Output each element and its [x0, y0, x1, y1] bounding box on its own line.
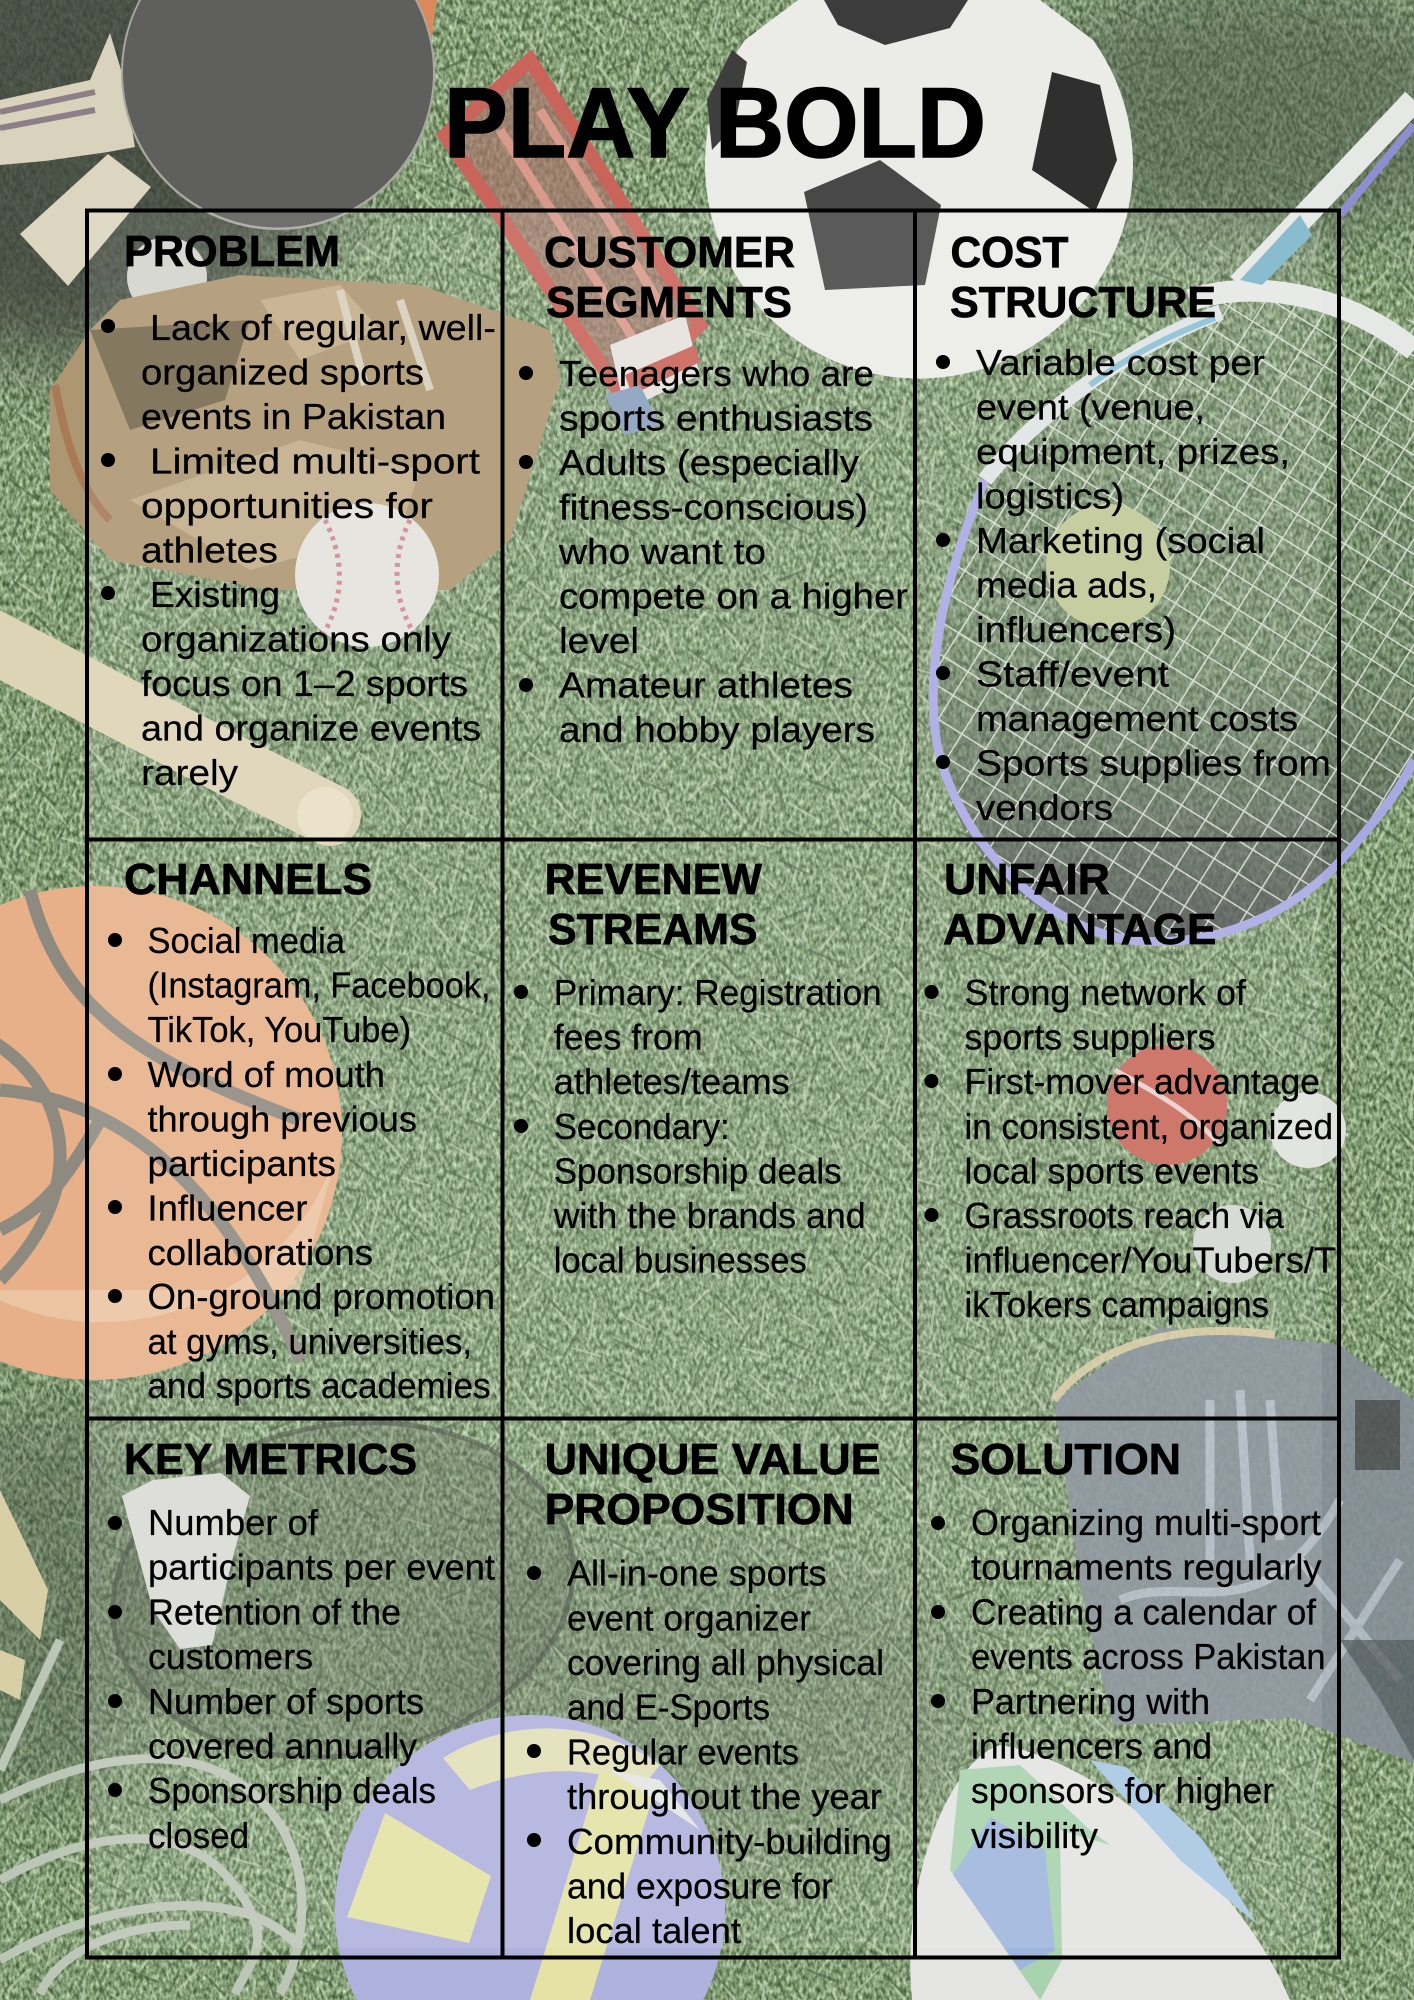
- list: channels: collaborations: [148, 1232, 373, 1273]
- table tennis paddle: [0, 0, 437, 317]
- list: key metrics: participants per event: [148, 1547, 495, 1588]
- heading: revenew streams: REVENEW: [545, 855, 762, 904]
- list: customer segments: Amateur athletes: [559, 664, 853, 706]
- list: problem: organized sports: [141, 352, 424, 392]
- list: unfair advantage: Grassroots reach via: [964, 1195, 1285, 1236]
- list: key metrics: customers: [148, 1636, 313, 1677]
- list: revenew streams: Sponsorship deals: [554, 1150, 842, 1192]
- skipping rope handles: [0, 1490, 302, 1994]
- lean canvas grid: [87, 210, 1339, 1958]
- list: cost structure: Variable cost per: [976, 342, 1265, 383]
- list: problem: opportunities for: [141, 485, 433, 526]
- heading: customer segments: CUSTOMER: [544, 228, 795, 277]
- list: solution: Creating a calendar of: [971, 1591, 1317, 1632]
- heading: unfair advantage: UNFAIR: [944, 855, 1110, 904]
- baseball bat: [0, 640, 353, 843]
- list: key metrics: Retention of the: [148, 1591, 401, 1632]
- baseball: [295, 503, 439, 647]
- list: customer segments: Teenagers who are: [559, 353, 874, 394]
- heading: solution: SOLUTION: [950, 1435, 1181, 1484]
- panel: channels: [108, 855, 495, 1406]
- list: cost structure: media ads,: [976, 564, 1157, 606]
- list: revenew streams: local businesses: [554, 1240, 807, 1280]
- shuttlecock: [122, 1473, 250, 1649]
- rugby ball: [910, 1745, 1290, 2000]
- list: channels: Influencer: [148, 1188, 308, 1228]
- list: cost structure: management costs: [976, 698, 1298, 739]
- list: unique value proposition: event organizer: [567, 1597, 811, 1638]
- list: key metrics: covered annually: [148, 1726, 417, 1766]
- list: key metrics: Sponsorship deals: [148, 1770, 436, 1811]
- panel: unfair advantage: [924, 855, 1336, 1325]
- list: solution: events across Pakistan: [971, 1636, 1326, 1677]
- list: unique value proposition: Regular events: [567, 1731, 799, 1772]
- list: key metrics: [108, 1502, 495, 1856]
- lighter overlay behind grid: [87, 212, 1322, 1948]
- list: solution: sponsors for higher: [971, 1770, 1274, 1811]
- list: unfair advantage: local sports events: [964, 1150, 1259, 1192]
- list: unfair advantage: [924, 972, 1336, 1325]
- list: customer segments: compete on a higher: [559, 576, 908, 616]
- list: cost structure: vendors: [976, 787, 1113, 828]
- heading: customer segments: SEGMENTS: [546, 278, 792, 327]
- panel: cost structure: [936, 228, 1331, 828]
- list: solution: influencers and: [971, 1726, 1212, 1766]
- list: customer segments: Adults (especially: [559, 442, 859, 483]
- panel: key metrics: [108, 1435, 495, 1856]
- heading: cost structure: [950, 228, 1216, 327]
- list: channels: at gyms, universities,: [148, 1321, 472, 1362]
- list: revenew streams: [514, 972, 882, 1280]
- soccer ball: [705, 0, 1133, 379]
- list: unique value proposition: All-in-one sports: [567, 1553, 826, 1594]
- list: customer segments: who want to: [558, 531, 766, 572]
- list: customer segments: sports enthusiasts: [559, 398, 873, 438]
- list: cost structure: Marketing (social: [976, 520, 1265, 561]
- list: problem: organizations only: [141, 618, 451, 660]
- heading: problem: PROBLEM: [124, 227, 340, 276]
- list: revenew streams: Secondary:: [554, 1106, 730, 1147]
- list: revenew streams: with the brands and: [553, 1195, 866, 1236]
- list: channels: (Instagram, Facebook,: [148, 964, 490, 1006]
- list: cost structure: influencers): [976, 609, 1176, 650]
- list: unique value proposition: Community-building: [567, 1821, 892, 1862]
- heading: unique value proposition: [545, 1435, 881, 1534]
- second racket: [86, 1387, 600, 1793]
- list: customer segments: level: [559, 620, 639, 661]
- panel: revenew streams: [514, 855, 882, 1280]
- list: unfair advantage: ikTokers campaigns: [964, 1284, 1269, 1325]
- heading: customer segments: [544, 228, 795, 327]
- list: solution: tournaments regularly: [971, 1547, 1322, 1588]
- list: solution: [931, 1502, 1326, 1856]
- list: solution: Partnering with: [971, 1681, 1210, 1722]
- list: channels: Word of mouth: [148, 1054, 385, 1095]
- list: unfair advantage: First-mover advantage: [964, 1061, 1320, 1102]
- list: problem: rarely: [141, 752, 238, 793]
- panel: solution: [931, 1435, 1326, 1856]
- heading: revenew streams: [545, 855, 762, 954]
- list: channels: through previous: [148, 1098, 417, 1140]
- list: problem: focus on 1–2 sports: [141, 663, 468, 704]
- red cricket frame: [445, 60, 700, 435]
- panel: problem: [101, 227, 496, 793]
- running shoes: [1054, 1327, 1414, 1763]
- list: cost structure: logistics): [976, 476, 1124, 516]
- list: key metrics: Number of sports: [148, 1681, 424, 1722]
- list: channels: TikTok, YouTube): [148, 1009, 411, 1050]
- list: key metrics: closed: [148, 1815, 249, 1856]
- list: channels: participants: [148, 1143, 336, 1184]
- list: customer segments: [519, 353, 908, 750]
- list: channels: [108, 920, 495, 1406]
- badminton racket: [920, 100, 1414, 960]
- baseball glove: [50, 275, 560, 590]
- list: problem: and organize events: [141, 708, 481, 748]
- list: channels: and sports academies: [148, 1365, 490, 1406]
- list: problem: events in Pakistan: [141, 396, 446, 437]
- list: cost structure: Sports supplies from: [976, 742, 1331, 784]
- list: unfair advantage: sports suppliers: [964, 1017, 1216, 1058]
- list: customer segments: and hobby players: [559, 709, 875, 750]
- list: channels: Social media: [148, 920, 346, 961]
- list: channels: On-ground promotion: [148, 1276, 495, 1317]
- list: unique value proposition: throughout the year: [567, 1776, 882, 1817]
- list: unique value proposition: local talent: [567, 1910, 741, 1951]
- list: problem: [101, 307, 496, 793]
- list: unfair advantage: influencer/YouTubers/T: [964, 1240, 1336, 1280]
- heading: unique value proposition: UNIQUE VALUE: [545, 1435, 881, 1484]
- list: solution: Organizing multi-sport: [971, 1502, 1321, 1543]
- heading: unique value proposition: PROPOSITION: [545, 1485, 854, 1534]
- list: problem: Limited multi-sport: [150, 440, 480, 482]
- panel: customer segments: [519, 228, 908, 750]
- heading: key metrics: KEY METRICS: [124, 1435, 417, 1484]
- list: revenew streams: fees from: [554, 1017, 703, 1058]
- list: cost structure: Staff/event: [976, 654, 1169, 694]
- list: unique value proposition: and exposure for: [567, 1866, 833, 1906]
- list: key metrics: Number of: [148, 1502, 319, 1543]
- volleyball: [335, 1715, 725, 2000]
- basketball: [0, 886, 342, 1380]
- list: cost structure: [936, 342, 1331, 828]
- list: solution: visibility: [971, 1815, 1098, 1856]
- list: unfair advantage: in consistent, organized: [964, 1106, 1333, 1147]
- title: PLAY BOLD: [444, 67, 986, 178]
- cricket ball and golf balls: [1107, 1045, 1346, 1283]
- heading: revenew streams: STREAMS: [548, 905, 758, 954]
- list: unique value proposition: covering all physical: [567, 1642, 884, 1683]
- list: cost structure: event (venue,: [976, 386, 1205, 428]
- list: unique value proposition: and E-Sports: [567, 1687, 770, 1728]
- panel: unique value proposition: [527, 1435, 892, 1951]
- list: unfair advantage: Strong network of: [964, 972, 1247, 1013]
- heading: channels: CHANNELS: [124, 855, 372, 904]
- heading: cost structure: COST: [950, 228, 1069, 277]
- list: customer segments: fitness-conscious): [559, 486, 868, 528]
- list: problem: Lack of regular, well-: [150, 307, 496, 348]
- list: problem: Existing: [150, 574, 280, 615]
- heading: unfair advantage: [943, 855, 1216, 954]
- list: problem: athletes: [141, 530, 278, 570]
- list: cost structure: equipment, prizes,: [976, 431, 1290, 472]
- list: unique value proposition: [527, 1553, 892, 1951]
- list: revenew streams: Primary: Registration: [554, 972, 882, 1013]
- heading: cost structure: STRUCTURE: [950, 278, 1216, 327]
- tennis ball: [1046, 504, 1170, 628]
- heading: unfair advantage: ADVANTAGE: [943, 905, 1216, 954]
- list: revenew streams: athletes/teams: [554, 1061, 790, 1102]
